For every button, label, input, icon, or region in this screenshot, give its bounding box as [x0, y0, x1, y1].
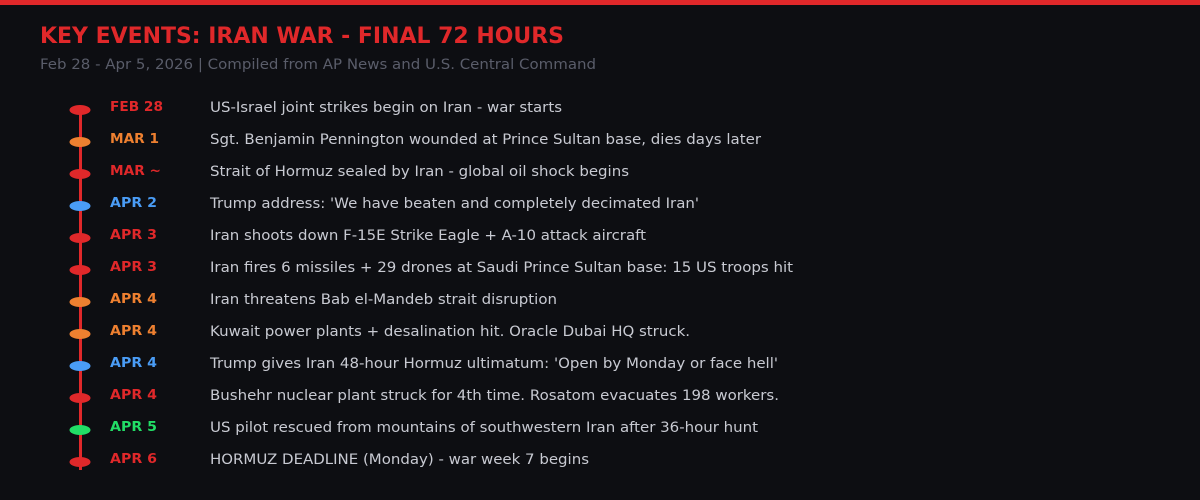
event 6: APR 3 [110, 260, 157, 275]
title: KEY EVENTS: IRAN WAR - FINAL 72 HOURS [40, 24, 564, 49]
event 2: Sgt. Benjamin Pennington wounded at Prince Sultan base, dies days later [210, 132, 761, 148]
event 2: MAR 1 [110, 132, 159, 147]
event 1: FEB 28 [110, 100, 163, 115]
event 4: APR 2 [110, 196, 157, 211]
event 3: Strait of Hormuz sealed by Iran - global oil shock begins [210, 164, 629, 180]
event 1: US-Israel joint strikes begin on Iran - war starts [210, 100, 562, 116]
event 10: Bushehr nuclear plant struck for 4th time. Rosatom evacuates 198 workers. [210, 388, 779, 404]
top accent bar [0, 0, 1200, 5]
event 10: APR 4 [110, 388, 157, 403]
subtitle: Feb 28 - Apr 5, 2026 | Compiled from AP News and U.S. Central Command [40, 57, 596, 73]
event 9: APR 4 [110, 356, 157, 371]
event 11: APR 5 [110, 420, 157, 435]
event 1 [70, 100, 562, 116]
event 5: APR 3 [110, 228, 157, 243]
timeline [70, 100, 794, 470]
event 9: Trump gives Iran 48-hour Hormuz ultimatum: 'Open by Monday or face hell' [209, 356, 778, 372]
event 12: HORMUZ DEADLINE (Monday) - war week 7 begins [210, 452, 589, 468]
event 7 [70, 292, 557, 308]
event 4: Trump address: 'We have beaten and completely decimated Iran' [209, 196, 699, 212]
event 6: Iran fires 6 missiles + 29 drones at Saudi Prince Sultan base: 15 US troops hit [210, 260, 794, 276]
event 8: Kuwait power plants + desalination hit. Oracle Dubai HQ struck. [210, 324, 690, 340]
event 7: Iran threatens Bab el-Mandeb strait disruption [210, 292, 557, 308]
event 7: APR 4 [110, 292, 157, 307]
event 12 [70, 452, 589, 468]
event 8: APR 4 [110, 324, 157, 339]
event 12: APR 6 [110, 452, 157, 467]
event 11: US pilot rescued from mountains of southwestern Iran after 36-hour hunt [210, 420, 759, 436]
event 5: Iran shoots down F-15E Strike Eagle + A-10 attack aircraft [210, 228, 647, 244]
event 3: MAR ~ [110, 164, 161, 179]
